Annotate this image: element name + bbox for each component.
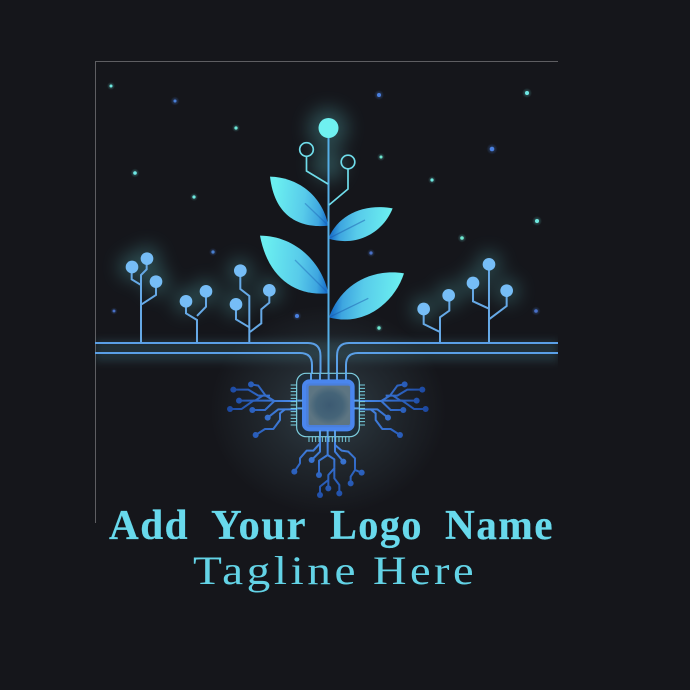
circuit traces: [230, 384, 426, 495]
logo name: Your: [211, 503, 307, 549]
leaf lower left: [260, 236, 328, 294]
circuit branch right: [329, 169, 348, 205]
circuit branch left: [306, 156, 328, 184]
core: [309, 386, 350, 425]
glows: [95, 108, 558, 515]
logo name: Logo: [330, 503, 423, 549]
top node: [318, 118, 338, 138]
ground lines: [95, 343, 558, 380]
connectors: [297, 373, 359, 437]
logo name: Add: [109, 503, 189, 549]
leaf upper left: [270, 177, 328, 226]
stars: [107, 82, 542, 332]
stem: [328, 130, 330, 380]
tagline: [193, 548, 477, 593]
tagline: Here: [373, 548, 477, 593]
logo name: [109, 503, 554, 549]
chip: [227, 373, 429, 498]
right tree group: [417, 258, 513, 342]
panel frame: [96, 62, 558, 523]
leaf lower right: [329, 272, 404, 320]
inner frame: [304, 381, 353, 429]
logo name: Name: [445, 503, 554, 549]
pins: [291, 385, 365, 442]
plant: [260, 118, 404, 380]
tagline: Tagline: [193, 548, 359, 593]
leaves: [260, 177, 404, 320]
left tree group: [126, 252, 276, 342]
outer shell: [297, 373, 359, 437]
leaf upper right: [328, 207, 393, 241]
